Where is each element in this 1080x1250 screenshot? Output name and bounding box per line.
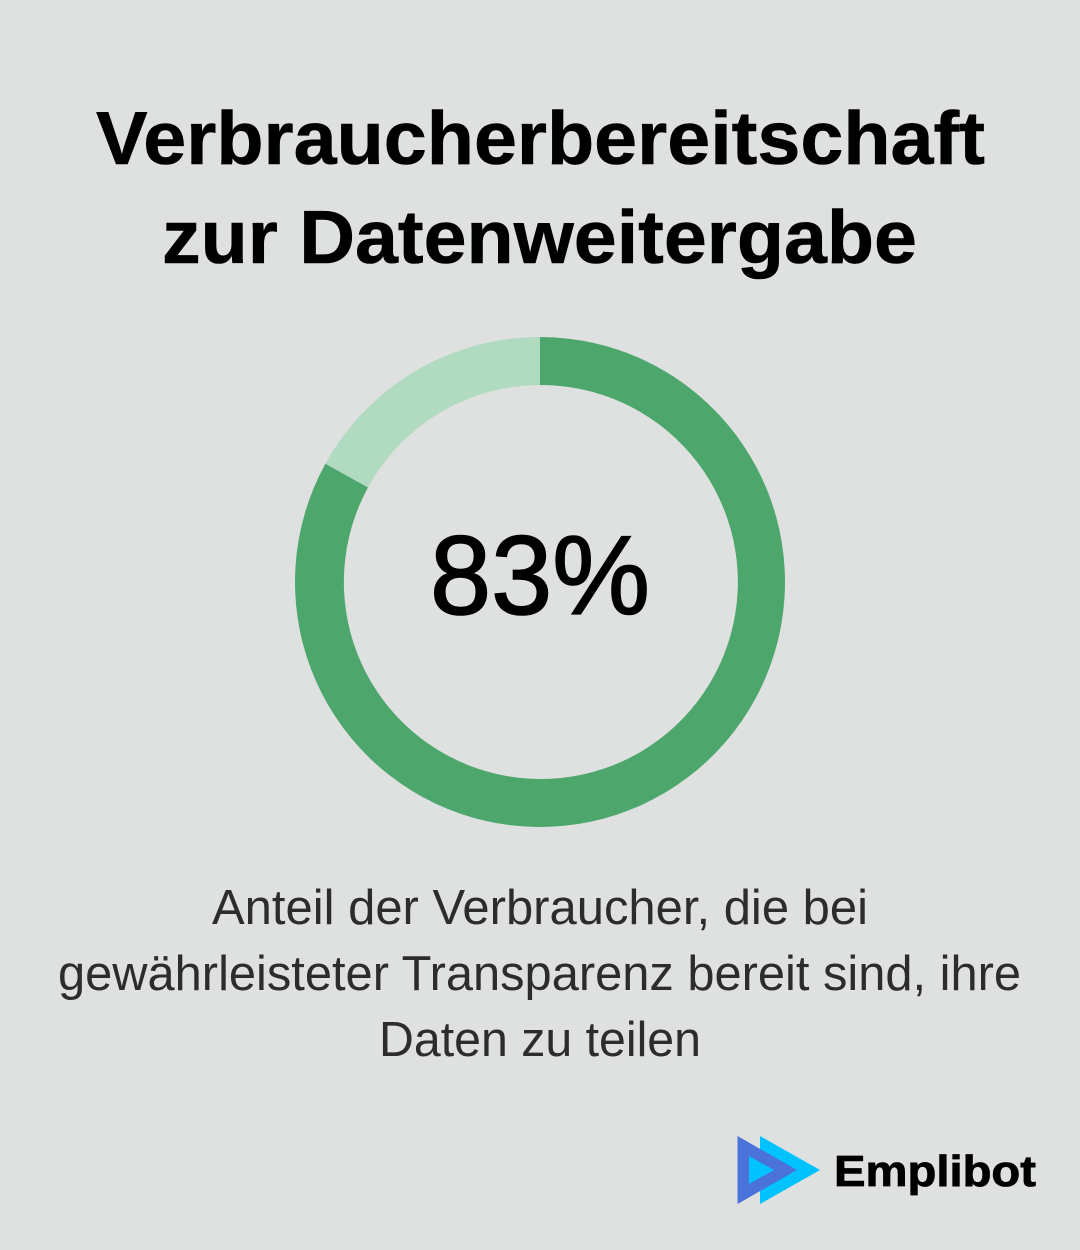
center value: 83% xyxy=(430,513,650,638)
title xyxy=(96,96,985,279)
description text: gewährleisteter Transparenz bereit sind, ihre xyxy=(58,947,1021,1001)
title: zur Datenweitergabe xyxy=(162,195,917,279)
main segment: 83% xyxy=(295,337,785,827)
donut chart: 83% xyxy=(295,337,785,827)
logo: Emplibot xyxy=(738,1136,1036,1204)
remaining segment: 17% xyxy=(325,337,540,488)
description text xyxy=(58,881,1021,1067)
wordmark: Emplibot xyxy=(834,1147,1036,1196)
description text: Anteil der Verbraucher, die bei xyxy=(212,881,868,935)
description text: Daten zu teilen xyxy=(379,1013,701,1067)
icon: play triangles xyxy=(738,1136,820,1204)
title: Verbraucherbereitschaft xyxy=(96,96,985,180)
